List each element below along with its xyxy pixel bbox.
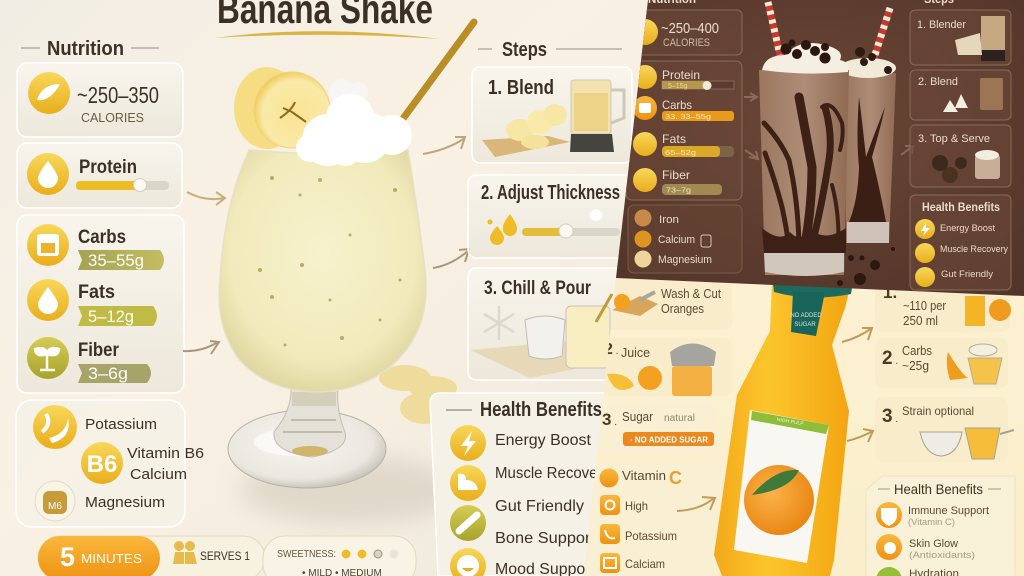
natural label: natural: [664, 413, 695, 424]
arrow: glass to thickness: [433, 249, 469, 268]
serving size: 250 ml: [903, 313, 938, 328]
icon: fats: [27, 279, 69, 321]
sweetness label: SWEETNESS:: [277, 549, 336, 560]
fats pill: [78, 306, 157, 326]
blender image: [955, 16, 1005, 61]
carbs value: ~25g: [902, 358, 929, 373]
icon: skin glow: [876, 534, 902, 560]
banana slices: [234, 67, 330, 149]
calcium text: Calcium: [658, 234, 695, 246]
card: protein: [17, 143, 182, 208]
blender: [570, 80, 624, 152]
icon: people: [173, 541, 197, 564]
speckles: [258, 176, 402, 346]
step 3: strain optional: [875, 397, 1014, 462]
blend image: [943, 78, 1003, 112]
calories value: ~250–350: [77, 82, 159, 108]
high text: High: [625, 499, 648, 513]
oranges text: Oranges: [661, 301, 704, 316]
arrows: macros to glass: [744, 93, 758, 159]
orange wedges: [607, 366, 711, 394]
step 2: juice: [603, 338, 732, 396]
time and servings pill: [38, 536, 265, 576]
vitamin text: Vitamin: [622, 468, 666, 483]
step number: 3 .: [882, 406, 898, 427]
icon: B6: B6: [87, 451, 117, 478]
carbs pill: 35–55g: [88, 251, 144, 270]
step 3: sugar: [600, 404, 716, 452]
icon: potassium: [600, 524, 620, 544]
icon: vitamin C: [600, 468, 618, 488]
antioxidants note: (Antioxidants): [909, 550, 975, 560]
calories label: CALORIES: [81, 110, 144, 125]
fiber pill: [78, 364, 151, 383]
front label: [734, 410, 829, 563]
muscle recovery: Muscle Recovery: [495, 465, 610, 482]
arrow: fiber to glass: [183, 341, 219, 354]
vitamin text: [622, 468, 682, 488]
carbs pill: [78, 250, 164, 270]
card: minerals: [16, 400, 204, 527]
potassium text: Potassium: [85, 416, 157, 433]
skin glow: Skin Glow: [909, 538, 958, 550]
vitamin B6 text: Vitamin B6: [127, 445, 204, 462]
chocolate shake glasses: [759, 2, 896, 286]
icon: magnesium jar: M6: [48, 501, 62, 512]
board: [470, 340, 620, 378]
carbs bar: 33. 33–55g: [665, 112, 711, 121]
heading: steps: Steps: [502, 39, 547, 61]
step number: 3 .: [602, 410, 617, 429]
icon: cutting board with oranges: [612, 292, 658, 316]
leaf: [752, 470, 799, 495]
front straw: [768, 2, 780, 55]
icon: calories: [632, 19, 658, 45]
calcium text: Calciam: [625, 557, 665, 571]
panel: banana shake infographic: [0, 0, 650, 576]
whipped cream: [296, 79, 412, 166]
icon: hydration: [876, 567, 902, 576]
label: CALORIES: [663, 37, 710, 49]
icon: carbs: [633, 96, 657, 120]
sweetness dots: [342, 550, 398, 558]
glass of shake: [566, 294, 612, 368]
carbs label: Carbs: [662, 98, 692, 112]
label strip: [751, 411, 829, 434]
minutes badge: 5: [60, 542, 75, 572]
icon: muscle: [450, 465, 486, 501]
icon: high: [600, 495, 620, 515]
glass foot: [228, 388, 386, 488]
fats bar: 65–52g: [665, 148, 696, 157]
card: vitamins and minerals: [586, 462, 734, 576]
fiber pill: 3–6g: [88, 364, 128, 383]
back glass: [840, 47, 896, 243]
juice bottle: [714, 275, 854, 576]
potassium text: Potassium: [625, 529, 677, 543]
heading: Health Benefits: [894, 481, 983, 497]
panel: chocolate shake infographic: [610, 0, 1024, 300]
chocolate chips on table: [837, 247, 895, 286]
step 3 title: 3. Chill & Pour: [484, 278, 591, 299]
step 2 title: 2. Adjust Thickness: [481, 182, 620, 204]
step number: 2 .: [882, 348, 898, 369]
juicer: [670, 344, 716, 396]
step number: 1.: [883, 283, 897, 302]
table shadow: [240, 456, 460, 524]
step 2: carbs: [875, 338, 1008, 388]
card: minerals: [628, 205, 742, 273]
iron text: Iron: [659, 214, 679, 226]
icon: iron: [634, 210, 652, 226]
icon: gut: [915, 267, 935, 287]
icon: carbs: [27, 224, 69, 266]
arrow: glass to blend: [423, 137, 465, 154]
immune support: Immune Support: [908, 505, 989, 517]
energy boost: Energy Boost: [940, 223, 996, 233]
step title: 2. Blend: [918, 76, 958, 88]
protein label: Protein: [662, 68, 700, 82]
step 3: top and serve: [910, 125, 1011, 187]
fats label: Fats: [662, 132, 686, 146]
fiber label: Fiber: [78, 340, 120, 361]
step number: 2 .: [604, 341, 618, 358]
icon: calcium: [634, 230, 652, 248]
fats label: Fats: [78, 282, 115, 303]
step 2: adjust thickness: [468, 175, 633, 258]
arrow: bottle to step 3: [847, 429, 873, 442]
step 3: chill and pour: [468, 268, 633, 380]
arrow: minerals to bottle: [677, 497, 715, 511]
icon: energy: [450, 425, 486, 461]
card: orange health benefits: [866, 476, 1015, 576]
icon: banana: [33, 405, 77, 449]
straw: [402, 22, 474, 120]
vitamin C note: (Vitamin C): [908, 517, 955, 527]
heading: health benefits: Health Benefits: [480, 399, 602, 421]
bowl of ice: [525, 316, 565, 359]
protein label: Protein: [79, 157, 137, 178]
neck label: NO ADDED: [790, 313, 822, 319]
icon: bone: [450, 505, 486, 541]
icon: jar: [701, 235, 711, 247]
label strip: HIGH PULP: [776, 417, 805, 427]
serves text: SERVES 1: [200, 549, 250, 563]
icon: B6: [81, 442, 123, 484]
juice label: Juice: [621, 345, 650, 360]
shake body: [219, 150, 426, 392]
shake glass: [219, 22, 474, 488]
step 1: calories: [875, 270, 1011, 332]
card: macros: [626, 61, 742, 200]
neck label: SUGAR: [794, 322, 816, 328]
card: calories: [630, 10, 742, 55]
value: ~250–400: [661, 20, 719, 37]
step 1: blend: [472, 67, 632, 163]
icon: magnesium jar: [35, 481, 75, 521]
chocolate chips: [780, 40, 830, 64]
carbs label: Carbs: [902, 343, 932, 358]
whipped cream top: [762, 43, 848, 74]
icon: magnesium: [634, 250, 652, 268]
sweetness card: [263, 536, 416, 576]
strainer bowl: [920, 432, 962, 456]
fiber label: Fiber: [662, 168, 690, 182]
banana pieces on board: [482, 104, 570, 157]
drops: [488, 214, 517, 245]
calories value: ~110 per: [903, 298, 947, 313]
gut friendly: Gut Friendly: [941, 269, 994, 279]
step: wash and cut: [606, 270, 732, 330]
icon: fiber: [633, 168, 657, 192]
icon: snowflake: [484, 306, 514, 340]
carbs label: Carbs: [78, 227, 126, 248]
icon: calcium: [600, 553, 620, 573]
step 1: blender: [910, 10, 1011, 65]
fiber bar: 73–7g: [666, 186, 691, 194]
fats pill: 5–12g: [88, 307, 134, 326]
icon: immune: [876, 502, 902, 528]
arrow: bottle to step 1: [842, 328, 872, 342]
heading: nutrition: Nutrition: [47, 38, 124, 60]
back straw: [874, 8, 890, 58]
title underline: [214, 31, 440, 39]
card: health benefits: [430, 393, 610, 576]
icon: smile: [450, 548, 486, 576]
juice cup: [965, 428, 1014, 459]
protein bar: 5–15g: [668, 83, 688, 90]
strain label: Strain optional: [902, 404, 974, 418]
gut friendly: Gut Friendly: [495, 498, 584, 515]
banana slices on table: [379, 365, 457, 424]
card: calories: [17, 63, 183, 137]
minutes badge: [38, 536, 160, 576]
magnesium text: Magnesium: [85, 494, 165, 511]
wash text: Wash & Cut: [661, 286, 721, 301]
icon: drop: [27, 153, 69, 195]
bottle cap: [772, 275, 854, 298]
juice glass and fruit: [965, 296, 1011, 326]
no added sugar badge: · NO ADDED SUGAR: [630, 436, 708, 444]
icon: fats: [633, 132, 657, 156]
card: chocolate health benefits: [910, 195, 1011, 290]
magnesium text: Magnesium: [658, 254, 712, 266]
vitamin text: C: [669, 468, 682, 488]
front glass: [759, 40, 849, 276]
juice glass with orange: [947, 344, 1002, 384]
heading: nutrition: [21, 40, 159, 55]
icon: protein: [633, 65, 657, 89]
icon: energy: [915, 219, 935, 239]
step 1 title: 1. Blend: [488, 77, 554, 99]
step title: 3. Top & Serve: [918, 133, 990, 145]
orange: [744, 465, 814, 535]
energy boost: Energy Boost: [495, 432, 592, 449]
sugar label: Sugar: [622, 409, 654, 424]
bone support: Bone Support: [495, 530, 596, 547]
cookies and cup: [932, 150, 1000, 183]
heading: Health Benefits: [922, 200, 1000, 214]
card: carbs, fats, fiber: [17, 215, 184, 393]
arrow: glass to step 3: [901, 146, 913, 155]
panel: orange juice infographic: [580, 270, 1024, 576]
step 2: blend: [910, 70, 1011, 120]
muscle recovery: Muscle Recovery: [940, 244, 1008, 254]
minutes badge: MINUTES: [81, 551, 142, 566]
step title: 1. Blender: [917, 19, 966, 31]
icon: fiber: [27, 337, 69, 379]
icon: muscle: [915, 243, 935, 263]
thickness slider: [522, 209, 620, 238]
neck label: [790, 292, 825, 336]
icon: lemon: [28, 72, 70, 114]
protein slider: [76, 178, 169, 192]
arrow: protein to glass: [187, 192, 225, 205]
calcium text: Calcium: [130, 466, 187, 483]
